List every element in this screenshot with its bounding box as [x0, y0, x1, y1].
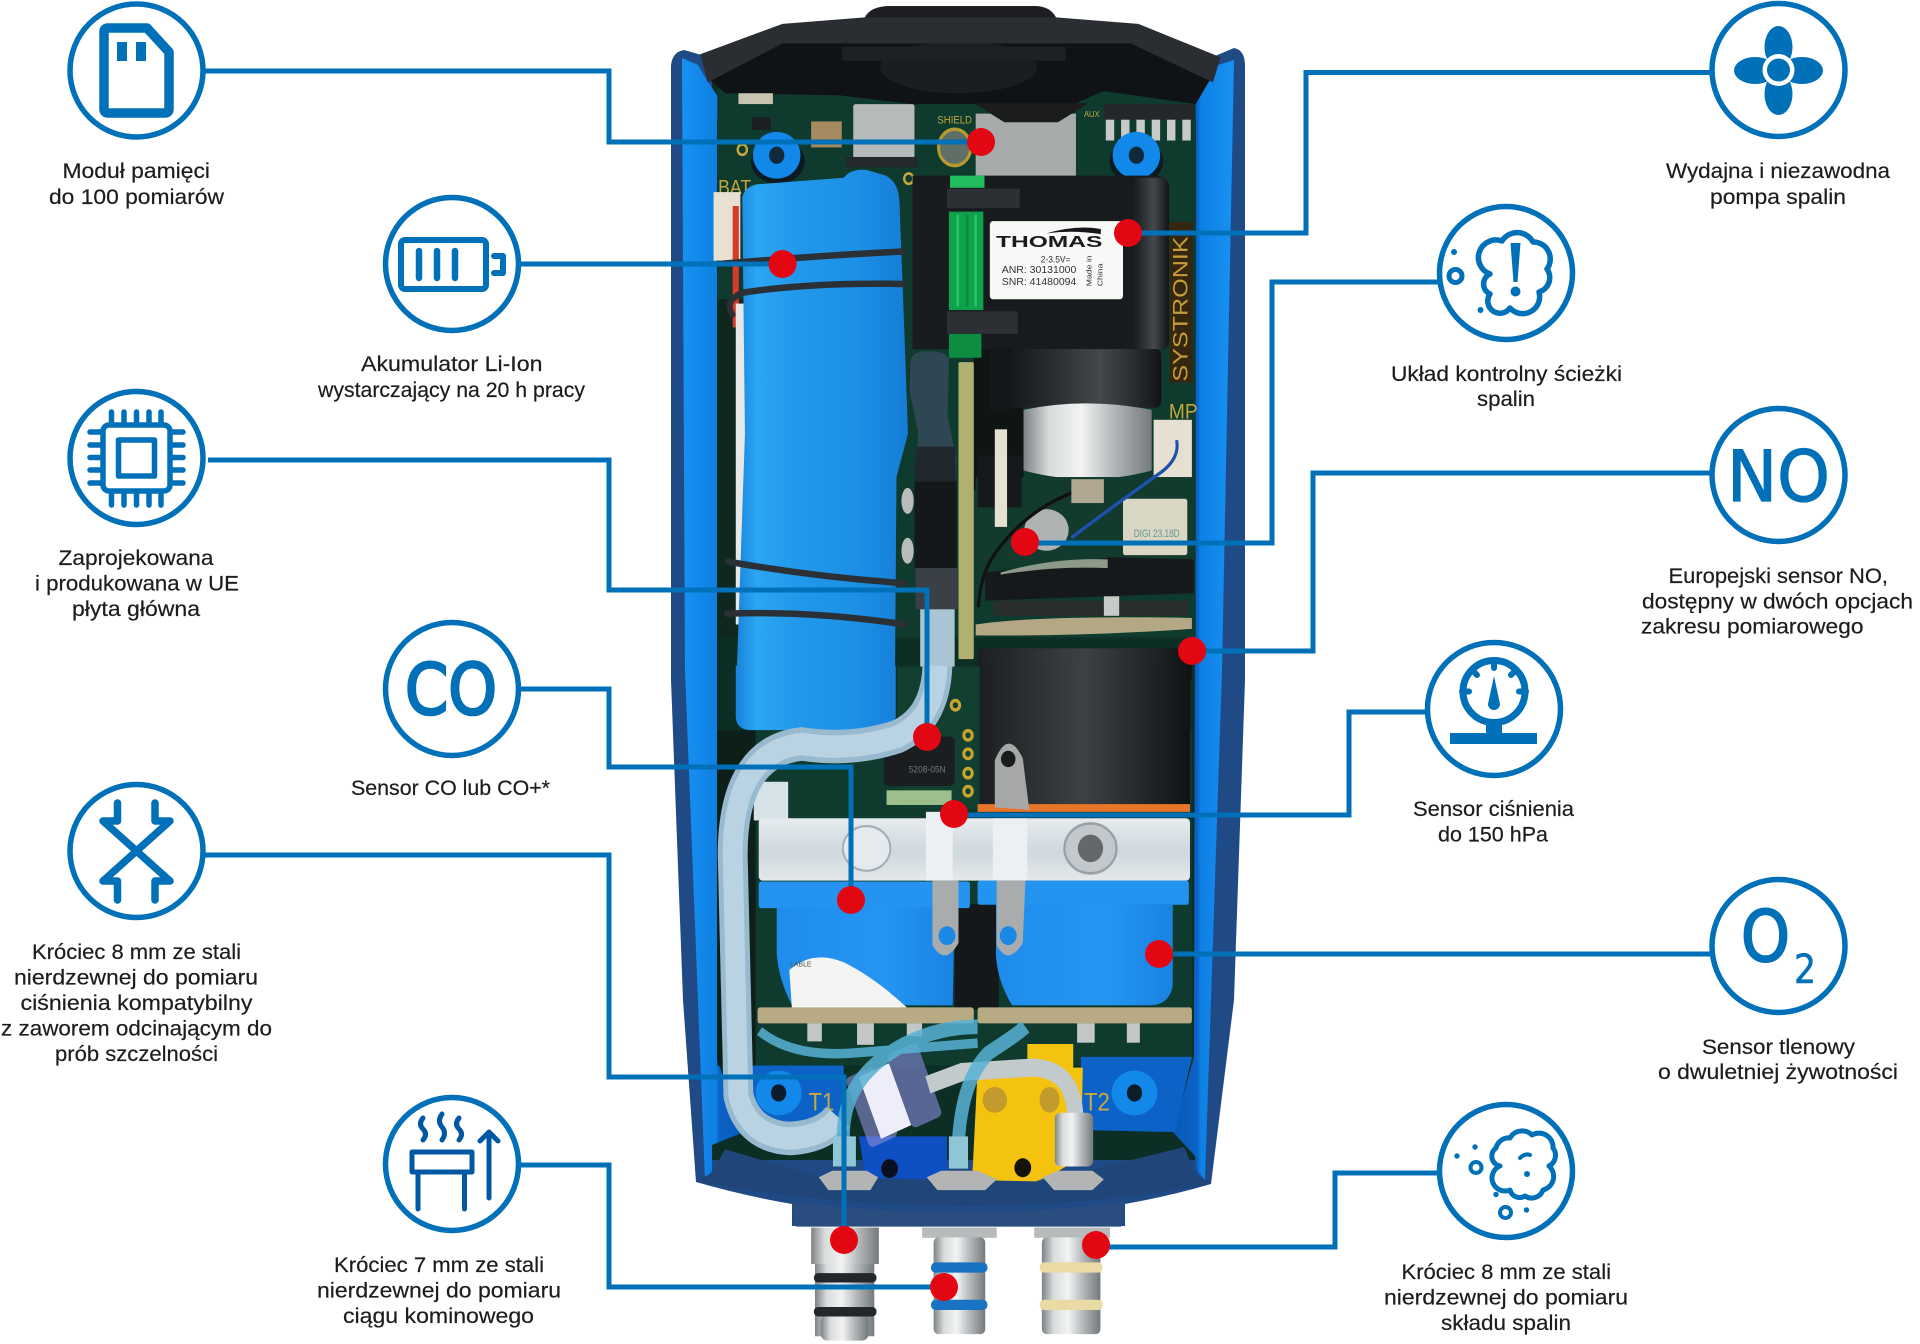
blue filter holder: [859, 1136, 947, 1186]
cyan hoses: [759, 1027, 1025, 1141]
board print: T2: T2: [1084, 1089, 1110, 1117]
board print: SHIELD: SHIELD: [937, 115, 972, 127]
sensor cap: [985, 557, 1194, 616]
board print: AUX: AUX: [1084, 110, 1100, 119]
board print: MP: MP: [1169, 399, 1198, 424]
terminal screws: [983, 1087, 1059, 1113]
lower plates: [758, 1007, 1192, 1023]
caption: Króciec 7 mm ze stali: [334, 1252, 544, 1277]
caption: [1413, 796, 1575, 846]
caption: składu spalin: [1441, 1310, 1571, 1335]
base band: [696, 1147, 1211, 1206]
yellow terminal: [972, 1044, 1083, 1188]
port 2: [922, 1228, 997, 1334]
callout: battery: [317, 198, 585, 402]
icon: O2: [1712, 880, 1845, 1012]
caption: o dwuletniej żywotności: [1658, 1059, 1898, 1084]
icon: cloud warning: [1440, 206, 1572, 340]
caption: [1, 939, 272, 1066]
USB-C socket: [853, 104, 914, 158]
connector: battery: [519, 250, 796, 278]
motor collar: [1008, 349, 1161, 408]
port 3: [1034, 1228, 1110, 1334]
right blue frame: [1173, 60, 1234, 1180]
motor can: [1024, 403, 1152, 479]
caption: Sensor tlenowy: [1702, 1034, 1855, 1059]
caption: [35, 545, 239, 621]
icon: NO: [1712, 408, 1845, 542]
pump label: ANR: 30131000: [1002, 264, 1076, 275]
connector: pump: [1114, 72, 1711, 247]
housing outer shell: [671, 48, 1245, 1226]
hose ends: [833, 1136, 968, 1169]
large transparent hose: [733, 666, 937, 1139]
board print: BAT: BAT: [718, 176, 752, 198]
connector: flow control: [1011, 282, 1438, 556]
connector: draught port: [519, 1165, 958, 1301]
icon: NO: NO: [1727, 436, 1830, 518]
right sensor body: [978, 881, 1189, 1005]
left sensor body: [759, 881, 970, 1010]
port 1: [811, 1228, 879, 1341]
caption: [1641, 563, 1913, 638]
icon: smoke cloud: [1440, 1104, 1572, 1238]
caption: prób szczelności: [55, 1041, 218, 1066]
icon: pressure gauge: [1428, 642, 1560, 776]
caption: [317, 1252, 561, 1328]
sensor metal tab: [995, 744, 1029, 810]
connector: flue gas port: [1082, 1173, 1439, 1259]
icon: chip: [70, 392, 203, 524]
callout: draught port: [317, 1098, 561, 1328]
icon: battery: [386, 198, 518, 330]
lower right board: [976, 477, 1195, 564]
caption: [1658, 1034, 1898, 1084]
caption: Europejski sensor NO,: [1668, 563, 1888, 588]
interior board background: [712, 70, 1202, 1160]
callout: flow control: [1391, 206, 1622, 411]
connector: NO sensor: [1178, 473, 1711, 665]
shield contact: [939, 129, 971, 166]
dark top chamber: [708, 39, 1211, 104]
caption: Sensor CO lub CO+*: [351, 775, 551, 800]
caption: i produkowana w UE: [35, 570, 239, 596]
caption: pompa spalin: [1710, 184, 1846, 209]
caption: dostępny w dwóch opcjach: [1642, 588, 1913, 614]
caption: nierdzewnej do pomiaru: [1384, 1284, 1628, 1310]
top cover: [700, 6, 1221, 82]
printed logo strip: SYSTRONIK: [1168, 236, 1192, 382]
callout: pressure port: [1, 784, 272, 1066]
orange seal: [978, 804, 1190, 812]
caption: [1666, 158, 1891, 209]
callout: pump: [1666, 4, 1891, 209]
gold pads: [951, 701, 972, 796]
blue tray left: [745, 1065, 844, 1143]
icon: CO: [386, 622, 518, 756]
motor wires: [978, 440, 1177, 607]
battery cell: [737, 170, 908, 680]
memory card slot: [976, 114, 1076, 177]
motor connector: [1154, 420, 1192, 478]
battery connector: [714, 192, 740, 327]
clear sensor manifold: [759, 812, 1190, 881]
sensor upper plate: [976, 617, 1192, 636]
icon: O2: 2: [1794, 947, 1816, 993]
caption: Moduł pamięci: [62, 158, 210, 183]
boss lower left: [756, 1071, 802, 1115]
callout: memory module: [49, 4, 224, 209]
tube coupling: [901, 351, 958, 681]
callout: pressure sensor: [1413, 642, 1575, 846]
pressure sensor module: DIGI 23.18D: [1134, 527, 1180, 540]
pump label: [990, 221, 1123, 299]
connector: O2 sensor: [1145, 940, 1711, 968]
header pins: [1104, 104, 1194, 141]
left blue frame: [682, 58, 744, 1180]
left sensor body: LABLE: [790, 959, 812, 969]
callout: NO sensor: [1641, 408, 1913, 638]
pump label: SNR: 41480094: [1002, 275, 1076, 287]
connector: memory module: [204, 71, 995, 156]
upper internals: [700, 6, 1221, 681]
filter: [844, 1042, 943, 1148]
mounting boss right: [1110, 132, 1163, 184]
caption: ciśnienia kompatybilny: [20, 990, 253, 1015]
device: opened flue gas analyser: [671, 6, 1245, 1341]
caption: zakresu pomiarowego: [1641, 614, 1864, 638]
motor terminal: [1071, 479, 1104, 503]
hex nuts: [819, 1171, 1104, 1190]
icon: chimney draught: [386, 1098, 518, 1230]
sensor white label: [789, 957, 907, 1010]
caption: [1384, 1259, 1628, 1335]
caption: [317, 351, 585, 402]
caption: płyta główna: [72, 596, 201, 621]
vertical daughter board: [958, 362, 974, 659]
battery retaining rings: [723, 252, 905, 624]
icon: fan: [1712, 4, 1845, 136]
pump label: THOMAS: [996, 234, 1103, 251]
callout: flue gas port: [1384, 1104, 1628, 1335]
small board parts: [738, 93, 913, 184]
main board upper: [717, 89, 1196, 637]
callout: main board: [35, 392, 239, 621]
side label strip: [736, 304, 747, 624]
gas pump body: [913, 176, 1169, 349]
caption: Króciec 8 mm ze stali: [1402, 1259, 1611, 1284]
pump label: Made in: [1085, 255, 1094, 286]
big sensor cylinder upper: [978, 648, 1192, 681]
caption: do 100 pomiarów: [49, 184, 224, 209]
relay part: [978, 429, 1022, 527]
pressure sensor module: [1123, 499, 1187, 555]
caption: [49, 158, 224, 209]
connector: pressure port: [204, 855, 858, 1254]
caption: Zaprojekowana: [58, 545, 215, 570]
caption: spalin: [1477, 386, 1535, 411]
board print: T1: T1: [808, 1089, 834, 1117]
caption: Wydajna i niezawodna: [1666, 158, 1891, 183]
caption: ciągu kominowego: [343, 1303, 534, 1328]
battery end: [736, 666, 896, 730]
caption: Króciec 8 mm ze stali: [32, 939, 241, 964]
upper stubs clear: [754, 782, 788, 820]
blue tray right: [1081, 1057, 1192, 1132]
caption: Sensor ciśnienia: [1413, 796, 1575, 821]
boss lower right: [1112, 1071, 1157, 1115]
main board lower: [717, 730, 1192, 1065]
icon: O2: O: [1741, 896, 1790, 978]
regulator chip: 5208-05N: [909, 764, 946, 774]
connector: pressure sensor: [940, 712, 1426, 828]
connector: main board: [208, 460, 941, 751]
icon: CO: CO: [405, 649, 497, 731]
caption: z zaworem odcinającym do: [1, 1016, 272, 1040]
mounting boss left: [751, 132, 805, 184]
pump label: 2-3.5V=: [1041, 254, 1070, 264]
big sensor cylinder: [980, 666, 1190, 808]
caption: Akumulator Li-Ion: [361, 351, 542, 376]
grey hose: [928, 1068, 1075, 1126]
callout: O2 sensor: [1658, 880, 1898, 1084]
lower internals: [696, 666, 1211, 1341]
pump label: China: [1096, 263, 1104, 286]
caption: wystarczający na 20 h pracy: [317, 377, 585, 402]
lower base: [792, 1202, 1125, 1227]
caption: [1391, 361, 1622, 411]
caption: do 150 hPa: [1438, 822, 1549, 846]
icon: memory card: [70, 4, 203, 137]
metal clips: [932, 881, 1025, 955]
callout: CO sensor: [351, 622, 551, 800]
pump body slots: [947, 189, 1020, 334]
caption: Układ kontrolny ścieżki: [1391, 361, 1622, 386]
capacitor: [1024, 509, 1069, 551]
pump green clips: [949, 176, 984, 358]
connector: CO sensor: [519, 689, 865, 914]
regulator chip: [884, 737, 955, 805]
gap between sensors: [955, 904, 999, 1010]
caption: nierdzewnej do pomiaru: [317, 1278, 561, 1302]
icon: crossed valve: [70, 784, 203, 918]
pins under plates: [807, 1023, 1140, 1045]
caption: nierdzewnej do pomiaru: [14, 964, 258, 990]
